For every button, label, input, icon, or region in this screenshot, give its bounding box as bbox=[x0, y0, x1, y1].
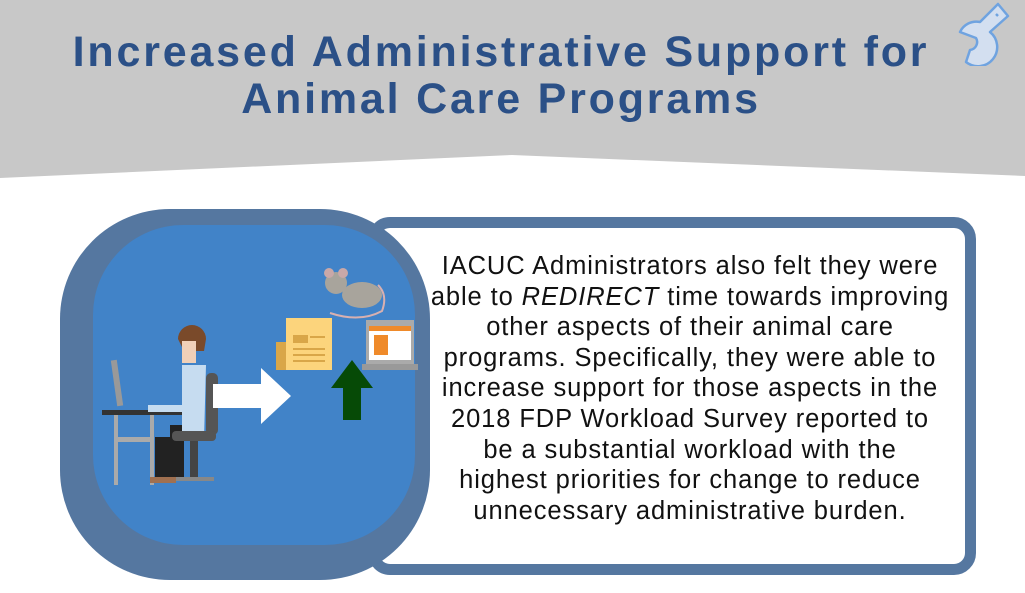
text block: other aspects of their animal care bbox=[486, 313, 894, 341]
text block: be a substantial workload with the bbox=[483, 436, 897, 464]
arrow: right bbox=[213, 368, 291, 424]
icon: laptop bbox=[362, 320, 418, 370]
icon: mouse bbox=[324, 268, 386, 318]
icon: document bbox=[276, 318, 332, 370]
header band bbox=[0, 0, 1025, 178]
text block: 2018 FDP Workload Survey reported to bbox=[451, 405, 929, 433]
icon: wrench bbox=[958, 2, 1010, 66]
text block: increase support for those aspects in the bbox=[442, 374, 938, 402]
text block: unnecessary administrative burden. bbox=[473, 497, 907, 525]
panel: text box bbox=[368, 217, 976, 575]
title: Animal Care Programs bbox=[241, 75, 761, 123]
text block: programs. Specifically, they were able to bbox=[444, 344, 936, 372]
panel: illustration bbox=[60, 209, 430, 580]
text block: IACUC Administrators also felt they were bbox=[442, 252, 938, 280]
title: Increased Administrative Support for bbox=[73, 28, 929, 76]
text block: able to REDIRECT time towards improving bbox=[431, 283, 949, 311]
arrow: up green bbox=[331, 360, 373, 420]
text block: highest priorities for change to reduce bbox=[459, 466, 921, 494]
title bbox=[73, 28, 929, 123]
illustration: person at desk bbox=[102, 325, 218, 485]
text block bbox=[431, 252, 949, 525]
